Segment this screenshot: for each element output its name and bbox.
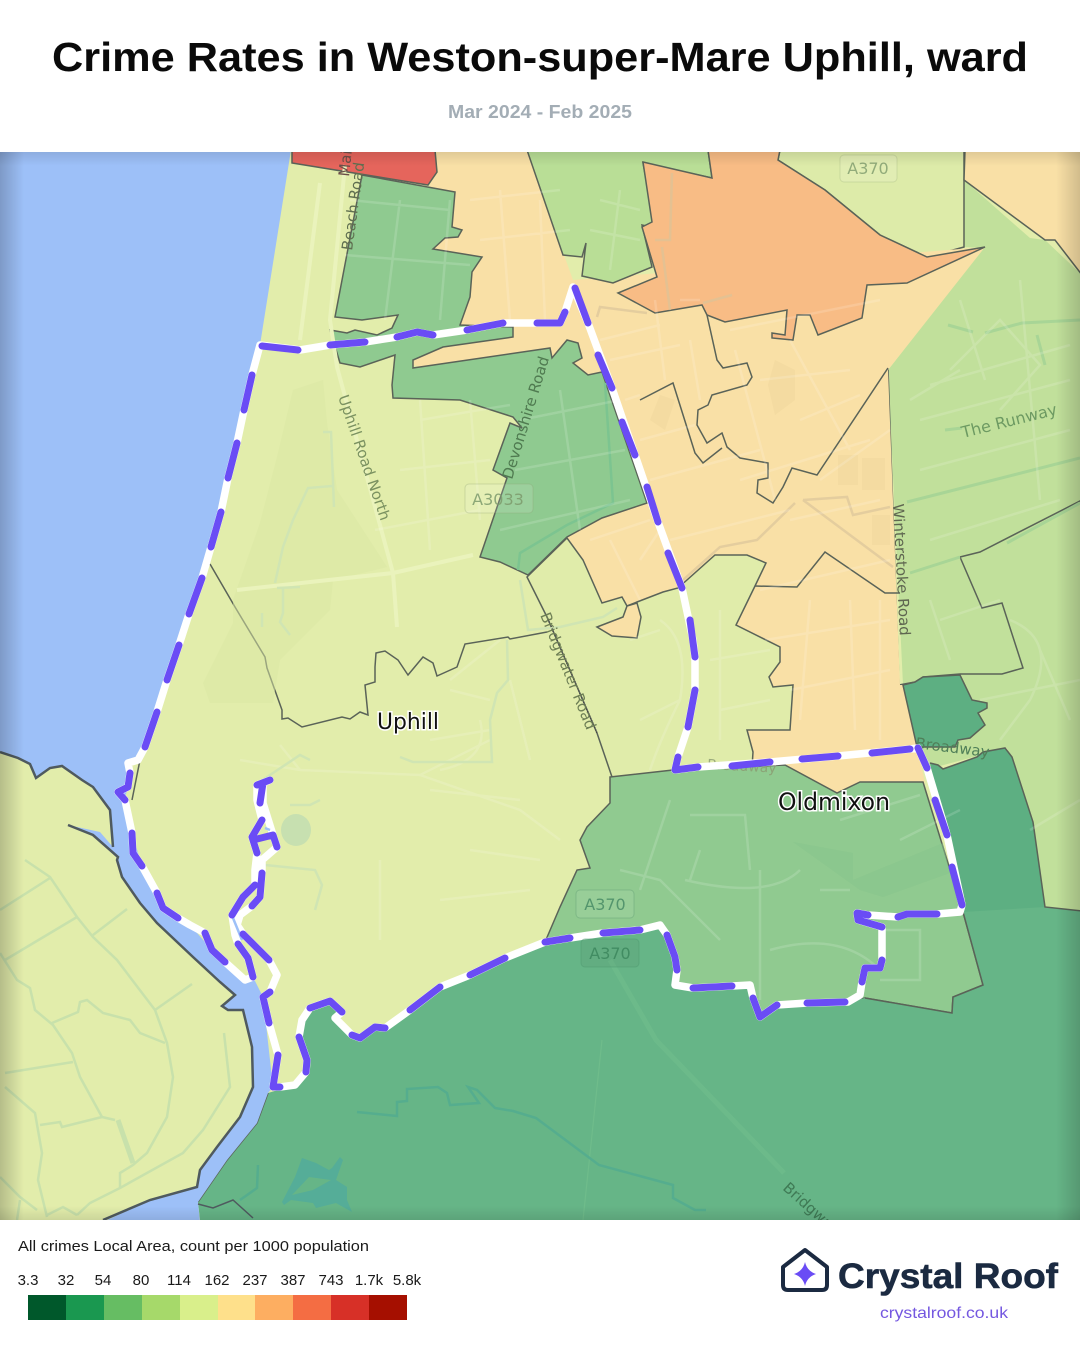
road label: Broadway east: Broadway [915, 734, 991, 761]
region: east green channels [907, 320, 1080, 573]
icon: house with star [783, 1250, 827, 1290]
region: Uphill east light [527, 538, 793, 777]
interior ward boundaries [132, 315, 900, 800]
region: top-right light strip [778, 150, 964, 257]
region: orange high crime [618, 150, 985, 340]
region: darker green patch [903, 675, 987, 747]
Oldmixon darker patch [793, 842, 950, 897]
place label: Oldmixon: Oldmixon [778, 788, 890, 816]
faint road network [240, 190, 1080, 1000]
tan building patches [650, 360, 890, 545]
place label: Uphill: Uphill [377, 710, 439, 735]
legend colour scale [28, 1295, 407, 1320]
wetland [282, 1157, 352, 1212]
Uphill channels [255, 432, 617, 910]
website url: crystalroof.co.uk [880, 1305, 1009, 1322]
west land thick drain [118, 1120, 133, 1163]
legend scale labels: 387 [280, 1272, 306, 1289]
logo: Crystal Roof [781, 1248, 1058, 1322]
road shield: A370 top: A370 [847, 159, 889, 178]
legend scale labels: 114 [167, 1272, 191, 1289]
subtitle: date range: Mar 2024 - Feb 2025 [448, 102, 632, 122]
Uphill park patches [203, 380, 387, 703]
legend scale labels [18, 1272, 422, 1289]
north green channel [518, 383, 613, 570]
legend scale labels: 237 [242, 1272, 268, 1289]
road shield: A370 top [840, 155, 897, 182]
legend scale labels: 54 [95, 1272, 111, 1289]
legend scale labels: 80 [133, 1272, 149, 1289]
legend scale labels: 5.8k [393, 1272, 422, 1289]
river sliver inside ward [233, 828, 270, 940]
south lighter road [610, 960, 784, 1173]
map edge shading [0, 152, 1080, 1220]
region: south dark green [198, 748, 1080, 1222]
south river channel [240, 1087, 706, 1210]
legend scale labels: 3.3 [18, 1272, 38, 1289]
region: Oldmixon mid green [545, 765, 983, 1017]
south thin track [583, 1040, 602, 1220]
creek at south bank [198, 1200, 253, 1218]
legend title: All crimes Local Area, count per 1000 population [18, 1238, 369, 1255]
region: small tan pocket [597, 603, 641, 638]
main road Uphill Road North [237, 165, 473, 627]
railway line along Bridgwater Road [547, 617, 597, 733]
road shield: A370 lower [581, 939, 639, 967]
title: Crime Rates in Weston-super-Mare Uphill, ward [52, 34, 1028, 80]
base land [0, 152, 1080, 1220]
legend scale labels: 32 [58, 1272, 74, 1289]
road label: Uphill Road North: Uphill Road North [334, 392, 394, 523]
road shield: A3033 [465, 484, 533, 513]
estuary west bank [0, 752, 253, 1220]
road label: Beach Road: Beach Road [338, 161, 368, 252]
road label: Devonshire Road: Devonshire Road [499, 354, 553, 481]
region: red high crime [292, 150, 437, 185]
region: north green [330, 175, 647, 575]
road shield: A370 middle: A370 [584, 895, 626, 914]
road shield: A370 middle [576, 890, 634, 918]
region: east green dividing lines [888, 368, 1080, 685]
region: top green [527, 150, 712, 283]
ward boundary: white casing [118, 287, 962, 1087]
road label: The Runway: The Runway [958, 400, 1059, 442]
orange and tan grey channels [597, 173, 893, 580]
road label: Broadway west: Broadway [707, 757, 777, 777]
legend scale labels: 743 [318, 1272, 344, 1289]
road label: Winterstoke Road: Winterstoke Road [889, 503, 914, 636]
sea and river estuary [0, 150, 291, 1222]
pond [281, 814, 311, 846]
region: darker strip east [930, 748, 1045, 912]
region: east green [888, 180, 1080, 912]
brand name: Crystal Roof [838, 1257, 1058, 1296]
west land waterways [0, 860, 230, 1220]
legend scale labels: 162 [204, 1272, 230, 1289]
legend scale labels: 1.7k [355, 1272, 384, 1289]
region: dark green boundary [198, 748, 1080, 1202]
road shield: A3033: A3033 [472, 490, 524, 509]
road shield: A370 lower: A370 [589, 944, 631, 963]
region: central tan [413, 152, 985, 793]
map panel [0, 152, 1080, 1220]
road label: Bridgwater Road: Bridgwater Road [536, 610, 600, 732]
region: top-right tan [964, 150, 1080, 275]
ward boundary: purple dashes [118, 288, 962, 1087]
legend [18, 1238, 422, 1320]
